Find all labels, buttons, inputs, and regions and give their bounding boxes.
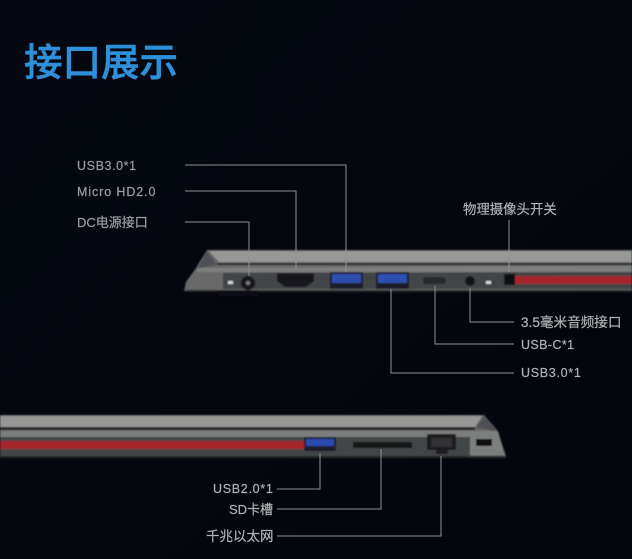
label: 3.5毫米音频接口: 3.5毫米音频接口 bbox=[521, 314, 621, 330]
camera switch bbox=[504, 274, 515, 285]
label: 千兆以太网: 千兆以太网 bbox=[206, 529, 274, 544]
red stripe bbox=[515, 276, 632, 284]
port: ethernet bbox=[427, 434, 456, 454]
port: DC jack bbox=[241, 276, 255, 290]
red stripe bbox=[0, 441, 305, 449]
indicator lights bbox=[228, 281, 491, 284]
label: 物理摄像头开关: 物理摄像头开关 bbox=[463, 202, 557, 217]
port: USB3.0 bbox=[330, 272, 363, 289]
label: USB2.0*1: USB2.0*1 bbox=[213, 482, 274, 496]
label: Micro HD2.0: Micro HD2.0 bbox=[77, 185, 156, 199]
label: USB3.0*1 lower: USB3.0*1 bbox=[521, 366, 582, 380]
port: audio jack bbox=[465, 276, 475, 286]
label: SD卡槽: SD卡槽 bbox=[229, 502, 273, 517]
port: HDMI bbox=[277, 273, 314, 287]
laptop: right side view bbox=[0, 415, 506, 458]
port: USB3.0 second bbox=[376, 272, 409, 289]
port: USB-C bbox=[423, 277, 446, 284]
title: 接口展示 bbox=[24, 42, 178, 85]
label: USB3.0*1 top: USB3.0*1 bbox=[77, 159, 137, 173]
label: DC电源接口: DC电源接口 bbox=[77, 215, 148, 230]
leader lines bbox=[185, 165, 514, 536]
laptop: left side view bbox=[184, 250, 632, 296]
port: SD slot bbox=[353, 442, 412, 448]
port: USB2.0 bbox=[304, 437, 336, 451]
lock slot bbox=[476, 439, 492, 446]
rubber feet bbox=[218, 291, 258, 296]
label: USB-C*1: USB-C*1 bbox=[521, 338, 575, 352]
